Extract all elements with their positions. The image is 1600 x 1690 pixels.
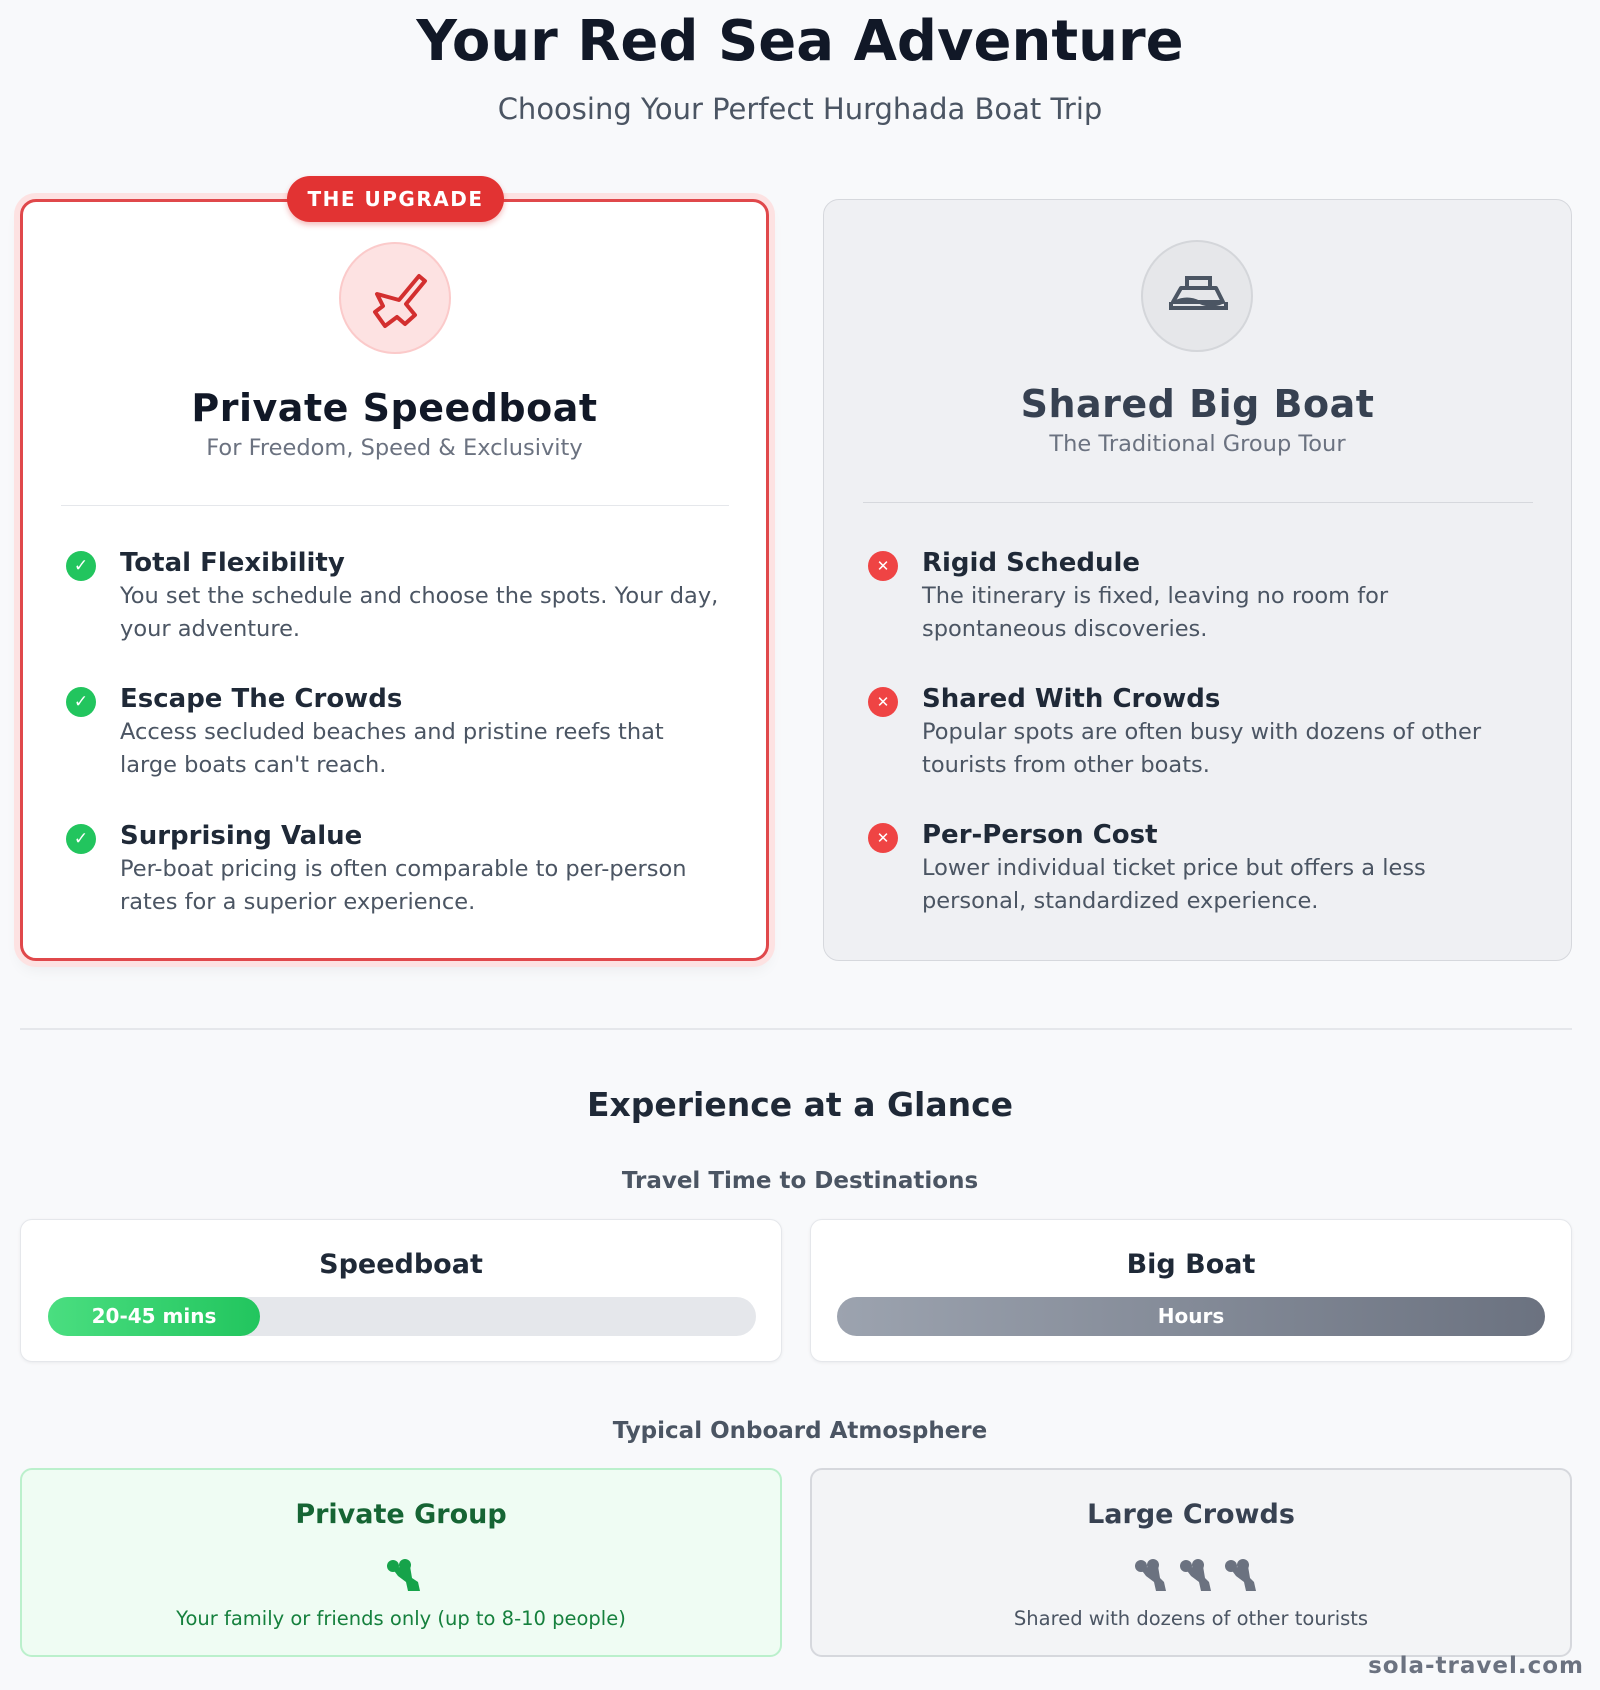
badge: the upgrade: THE UPGRADE <box>308 187 483 211</box>
item: surprising value <box>66 821 687 914</box>
item: shared with crowds: Popular spots are often busy with dozens of other <box>922 719 1481 745</box>
card title: Private Speedboat <box>191 386 598 430</box>
item: escape the crowds: ✓ <box>74 692 88 712</box>
panel: private group: Private Group <box>295 1499 507 1530</box>
item: total flexibility: Total Flexibility <box>120 548 345 578</box>
panel: private group <box>20 1468 782 1657</box>
item: escape the crowds: Escape The Crowds <box>120 684 402 714</box>
item: escape the crowds: large boats can't reach. <box>120 752 386 778</box>
item: rigid schedule: The itinerary is fixed, leaving no room for <box>922 583 1388 609</box>
item: total flexibility <box>66 548 718 642</box>
footer: source: sola-travel.com <box>1368 1653 1584 1679</box>
item: rigid schedule: ✕ <box>877 557 889 575</box>
item: escape the crowds <box>66 684 664 778</box>
item: per-person cost: ✕ <box>877 829 889 847</box>
panel: shared big boat <box>823 199 1572 961</box>
item: per-person cost: personal, standardized experience. <box>922 888 1318 914</box>
panel: private group: Your family or friends only (up to 8-10 people) <box>176 1607 626 1630</box>
item: per-person cost: Per-Person Cost <box>922 820 1158 850</box>
icon: crowd <box>1135 1559 1256 1591</box>
item: total flexibility: ✓ <box>74 556 88 576</box>
item: rigid schedule <box>868 548 1388 642</box>
chart: speedboat travel time <box>20 1219 782 1362</box>
panel: large crowds: Shared with dozens of other tourists <box>1014 1607 1368 1630</box>
icon: speedboat <box>339 242 451 354</box>
item: total flexibility: your adventure. <box>120 616 300 642</box>
section heading: Experience at a Glance <box>587 1085 1013 1124</box>
item: shared with crowds <box>868 684 1482 778</box>
item: rigid schedule: Rigid Schedule <box>922 548 1140 578</box>
icon: people <box>387 1559 420 1591</box>
chart: speedboat travel time: 20-45 mins <box>92 1304 216 1328</box>
item: per-person cost <box>868 820 1426 914</box>
panel: private speedboat <box>20 199 769 961</box>
item: shared with crowds: tourists from other boats. <box>922 752 1210 778</box>
panel: large crowds <box>810 1468 1572 1657</box>
card subtitle: The Traditional Group Tour <box>1049 431 1346 457</box>
item: surprising value: rates for a superior experience. <box>120 888 475 914</box>
title: Your Red Sea Adventure <box>416 9 1184 74</box>
chart: big boat travel time: Big Boat <box>1127 1249 1255 1280</box>
subtitle: Choosing Your Perfect Hurghada Boat Trip <box>498 92 1102 126</box>
panel: large crowds: Large Crowds <box>1087 1499 1295 1530</box>
item: per-person cost: Lower individual ticket price but offers a less <box>922 855 1426 881</box>
badge: the upgrade <box>287 176 504 222</box>
icon: big boat <box>1141 240 1253 352</box>
item: rigid schedule: spontaneous discoveries. <box>922 616 1207 642</box>
chart: big boat travel time: Hours <box>1158 1304 1224 1328</box>
chart: big boat travel time <box>810 1219 1572 1362</box>
item: surprising value: Per-boat pricing is often comparable to per-person <box>120 856 687 882</box>
subheading: atmosphere: Typical Onboard Atmosphere <box>613 1418 987 1444</box>
chart: speedboat travel time: Speedboat <box>319 1249 483 1280</box>
subheading: travel time: Travel Time to Destinations <box>622 1168 978 1194</box>
item: shared with crowds: ✕ <box>877 693 889 711</box>
card title: Shared Big Boat <box>1021 382 1374 426</box>
item: shared with crowds: Shared With Crowds <box>922 684 1220 714</box>
item: surprising value: ✓ <box>74 829 88 849</box>
item: surprising value: Surprising Value <box>120 821 362 851</box>
item: total flexibility: You set the schedule and choose the spots. Your day, <box>120 583 718 609</box>
card subtitle: For Freedom, Speed & Exclusivity <box>206 435 583 461</box>
item: escape the crowds: Access secluded beaches and pristine reefs that <box>120 719 664 745</box>
